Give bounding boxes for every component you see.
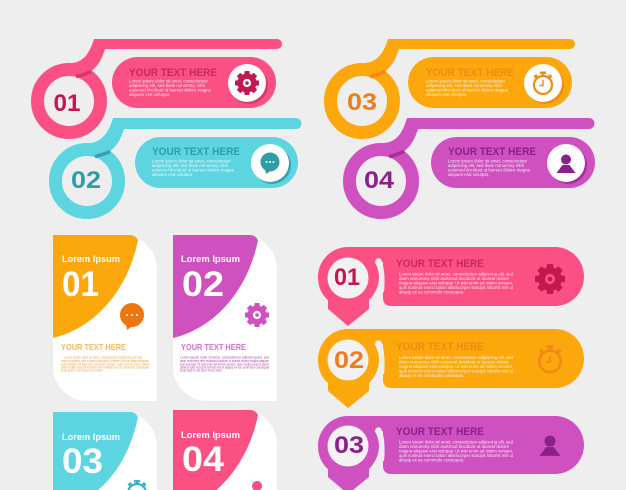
- icon: stopwatch: [128, 480, 146, 490]
- body text: Duis autem vel eum iriure dolor: [180, 369, 223, 373]
- body text: adipiscing elit, sed diam nonummy nibh: [152, 163, 228, 168]
- number 01: 01: [54, 90, 80, 117]
- body text: [61, 356, 149, 373]
- body text: aliquip ex ea commodo consequat.: [399, 290, 464, 294]
- body text: Lorem ipsum dolor sit amet, consectetuer: [129, 78, 208, 84]
- step 03 orange connector ring: [330, 39, 575, 132]
- body text: diam nonummy nibh euismod tincidunt ut laoreet dolore: [399, 444, 509, 449]
- body text: [180, 356, 269, 373]
- card number: 03: [62, 442, 103, 481]
- icon: gear: [245, 303, 269, 327]
- body text: Duis autem vel eum iriure dolor: [61, 369, 104, 373]
- card number: 04: [182, 440, 225, 479]
- card 02 purple: [173, 235, 277, 401]
- number 04: 04: [364, 167, 395, 194]
- body text: adipiscing elit, sed diam nonummy nibh: [129, 83, 205, 88]
- body text: magna aliquam erat volutpat. Ut wisi enim ad minim veniam,: [399, 448, 513, 454]
- icon: gear: [228, 64, 268, 104]
- body text: aliquam erat volutpat.: [152, 172, 193, 177]
- body text: diam nonummy nibh euismod tincidunt ut laoreet dolore: [399, 359, 509, 364]
- icon: stopwatch: [539, 345, 561, 372]
- body text: diam nonummy nibh euismod tincidunt ut laoreet dolore: [399, 276, 509, 281]
- step 03 orange pill: [408, 57, 572, 108]
- body text: [426, 78, 508, 97]
- card label: Lorem Ipsum: [62, 432, 120, 443]
- heading: YOUR TEXT HERE: [181, 342, 246, 352]
- icon: stopwatch: [524, 64, 564, 104]
- body text: Lorem ipsum dolor sit amet, consectetuer: [152, 158, 231, 164]
- body text: Lorem ipsum dolor sit amet, consectetuer adipiscing elit, sed: [399, 272, 513, 276]
- heading: YOUR TEXT HERE: [152, 146, 240, 158]
- number 03: 03: [347, 89, 377, 116]
- icon: chat: [120, 303, 144, 330]
- body text: [399, 272, 514, 294]
- card label: Lorem Ipsum: [181, 430, 240, 441]
- step 02 cyan connector ring: [56, 118, 302, 212]
- body text: euismod tincidunt ut laoreet dolore magna: [426, 88, 508, 92]
- number 02: 02: [334, 347, 364, 374]
- step 04 purple pill: [431, 137, 595, 188]
- body text: diam nonummy nibh euismod tincidunt ut laoreet dolore magna aliquam: [61, 359, 149, 363]
- step 01 pink connector ring: [38, 39, 282, 132]
- body text: [152, 158, 234, 177]
- body text: adipiscing elit, sed diam nonummy nibh: [426, 83, 502, 88]
- body text: adipiscing elit, sed diam nonummy nibh: [448, 163, 524, 168]
- card 01 orange: [53, 235, 157, 401]
- icon: gear: [535, 264, 565, 294]
- body text: Lorem ipsum dolor sit amet, consectetuer adipiscing elit, sed: [399, 440, 513, 444]
- banner 01 pink: [318, 247, 584, 326]
- card label: Lorem Ipsum: [62, 254, 120, 265]
- body text: [448, 158, 530, 177]
- card label: Lorem Ipsum: [181, 254, 240, 265]
- step 01 pink pill: [112, 57, 276, 108]
- body text: ullamcorper suscipit lobortis nisl ut aliquip ex ea commodo consequat: [61, 366, 149, 370]
- banner 02 orange: [318, 329, 584, 408]
- card 03 cyan: [53, 412, 157, 490]
- icon: person: [547, 144, 587, 184]
- body text: ullamcorper suscipit lobortis nisl ut aliquip ex ea commodo consequat: [180, 366, 269, 370]
- body text: erat volutpat. Ut wisi enim ad minim veniam, quis nostrud exerci tation: [180, 362, 269, 366]
- heading: YOUR TEXT HERE: [396, 341, 484, 353]
- body text: Lorem ipsum dolor sit amet, consectetuer: [448, 158, 527, 164]
- icon: person: [540, 436, 560, 456]
- body text: Lorem ipsum dolor sit amet, consectetuer: [426, 78, 505, 84]
- body text: [129, 78, 211, 97]
- number 03: 03: [334, 432, 364, 459]
- body text: erat volutpat. Ut wisi enim ad minim veniam, quis nostrud exerci tation: [61, 362, 149, 366]
- card number: 01: [62, 265, 99, 304]
- body text: euismod tincidunt ut laoreet dolore magna: [129, 88, 211, 92]
- step 04 purple connector ring: [350, 118, 594, 212]
- card 04 pink: [173, 410, 277, 490]
- number 02: 02: [71, 167, 101, 194]
- body text: aliquip ex ea commodo consequat.: [399, 373, 464, 378]
- body text: aliquam erat volutpat.: [426, 92, 467, 97]
- body text: aliquip ex ea commodo consequat.: [399, 458, 464, 462]
- body text: Lorem ipsum dolor sit amet, consectetuer adipiscing elit, sed: [180, 356, 269, 360]
- step 02 cyan pill: [135, 137, 298, 188]
- icon: person head: [252, 481, 262, 490]
- body text: Lorem ipsum dolor sit amet, consectetuer adipiscing elit sed: [64, 356, 142, 360]
- heading: YOUR TEXT HERE: [129, 67, 217, 79]
- body text: quis nostrud exerci tation ullamcorper suscipit lobortis nisl ut: [399, 285, 514, 290]
- body text: quis nostrud exerci tation ullamcorper suscipit lobortis nisl ut: [399, 453, 514, 458]
- heading: YOUR TEXT HERE: [448, 146, 536, 158]
- body text: aliquam erat volutpat.: [448, 172, 489, 177]
- body text: magna aliquam erat volutpat. Ut wisi enim ad minim veniam,: [399, 364, 513, 369]
- body text: [399, 440, 514, 462]
- body text: quis nostrud exerci tation ullamcorper suscipit lobortis nisl ut: [399, 368, 514, 373]
- heading: YOUR TEXT HERE: [396, 258, 484, 270]
- banner 03 purple: [318, 416, 584, 490]
- heading: YOUR TEXT HERE: [396, 426, 484, 438]
- body text: diam nonummy nibh euismod tincidunt ut laoreet dolore magna aliquam: [180, 359, 269, 363]
- body text: [399, 355, 514, 378]
- body text: aliquam erat volutpat.: [129, 92, 170, 97]
- heading: YOUR TEXT HERE: [426, 67, 514, 79]
- body text: euismod tincidunt ut laoreet dolore magna: [152, 168, 234, 172]
- body text: euismod tincidunt ut laoreet dolore magna: [448, 168, 530, 172]
- icon: chat: [251, 144, 291, 184]
- body text: Lorem ipsum dolor sit amet, consectetuer adipiscing elit, sed: [399, 355, 513, 360]
- heading: YOUR TEXT HERE: [61, 342, 126, 352]
- card number: 02: [182, 265, 224, 304]
- body text: magna aliquam erat volutpat. Ut wisi enim ad minim veniam,: [399, 280, 513, 286]
- number 01: 01: [334, 264, 360, 291]
